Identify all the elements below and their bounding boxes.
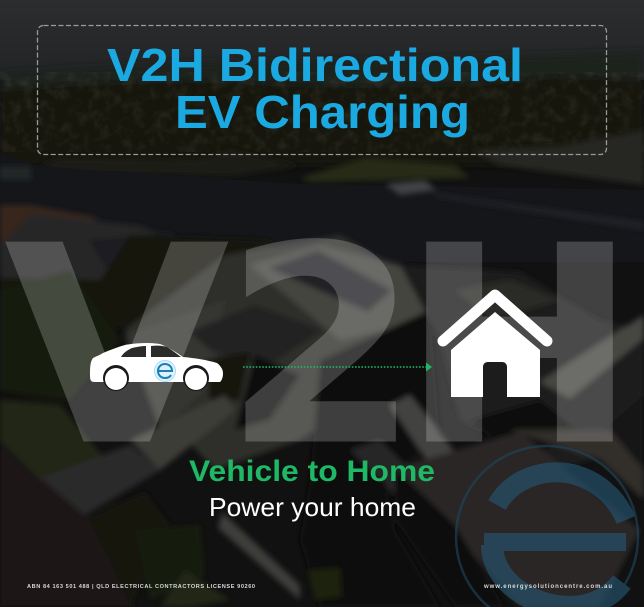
- large roof lower right: [395, 432, 640, 607]
- icon: house: [443, 295, 547, 397]
- title: V2H Bidirectional: [107, 39, 523, 91]
- watermark letters V2H: V: [6, 190, 230, 504]
- title: [107, 39, 523, 138]
- footer: website: www.energysolutioncentre.com.au: [483, 584, 612, 590]
- surrounding ground: [0, 270, 120, 400]
- title: EV Charging: [175, 86, 470, 138]
- right house: [400, 265, 644, 470]
- heading: Vehicle to Home: Vehicle to Home: [189, 455, 435, 488]
- central house: [125, 235, 425, 470]
- watermark letters V2H: [6, 189, 637, 504]
- watermark letters V2H: H: [402, 189, 637, 504]
- subheading: Power your home: Power your home: [209, 492, 416, 522]
- icon: car with logo: [90, 343, 223, 391]
- footer: licence details: ABN 84 163 501 488 | QLD ELECTRICAL CONTRACTORS LICENSE 90260: [27, 584, 255, 590]
- watermark letters V2H: 2: [225, 190, 419, 504]
- logo watermark: [456, 446, 638, 607]
- title box: [38, 26, 606, 154]
- arrow: vehicle to home: [243, 362, 432, 372]
